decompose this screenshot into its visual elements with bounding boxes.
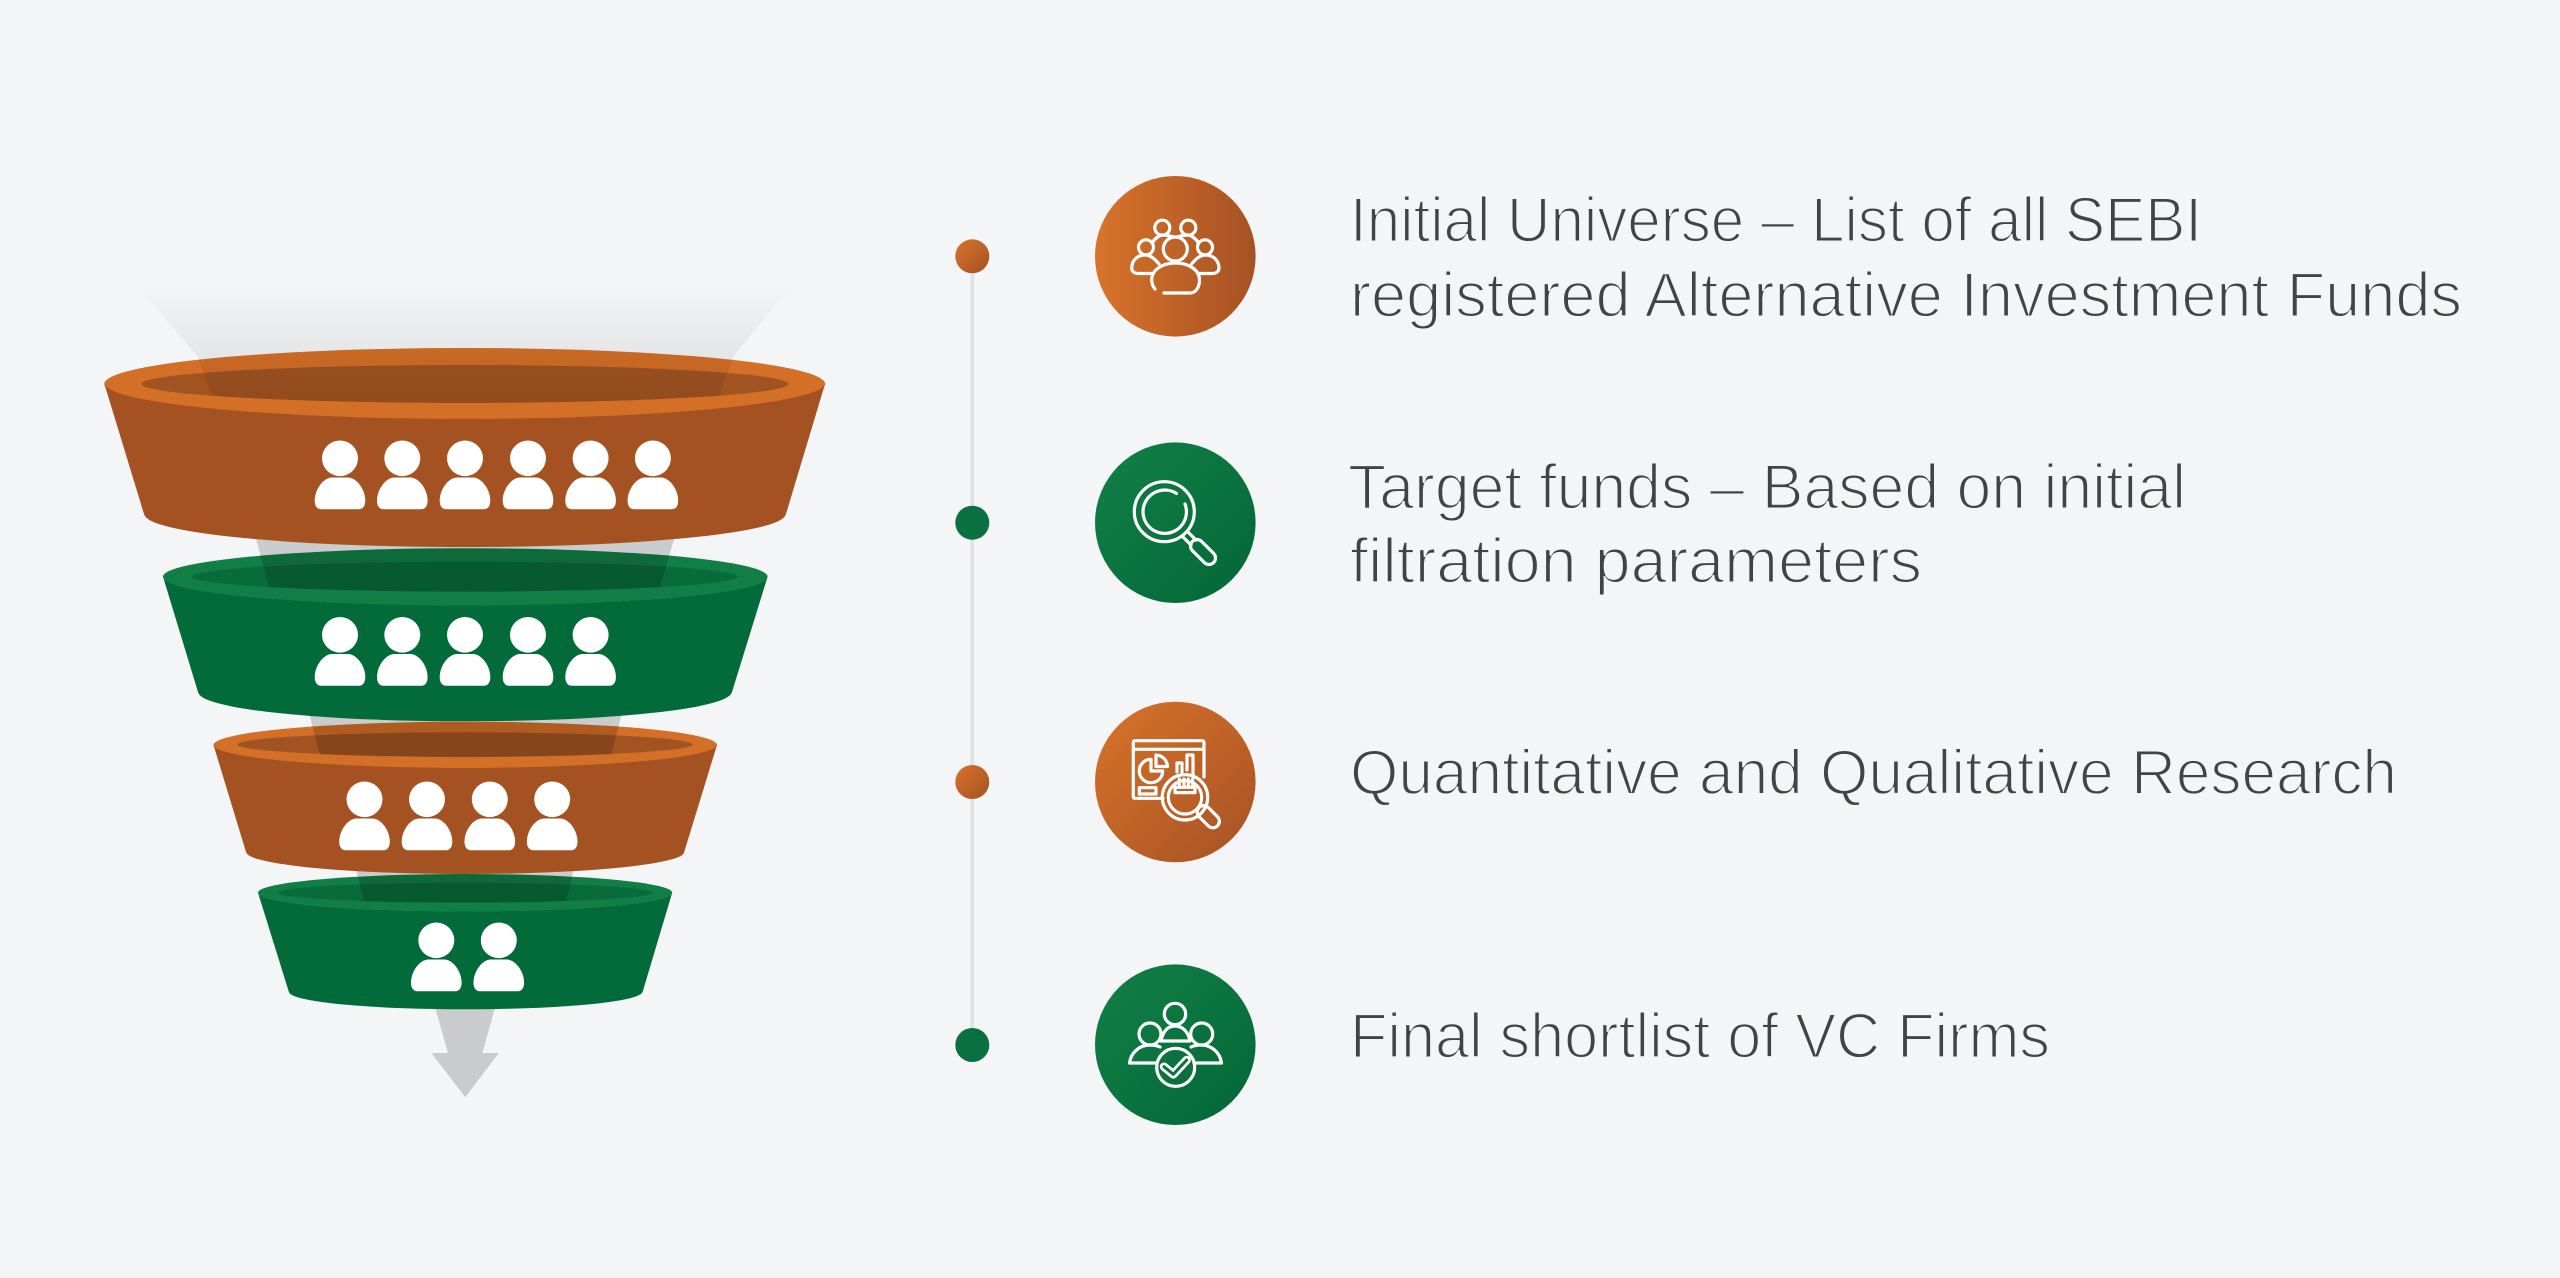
text: final shortlist: Final shortlist of VC Firms	[1350, 1002, 2050, 1072]
icon: magnifying glass	[1095, 442, 1256, 603]
people icons stage 4	[411, 922, 524, 991]
funnel stage 2 opening	[163, 548, 768, 605]
timeline dot 2	[955, 506, 989, 540]
funnel stage 2 body	[163, 577, 768, 721]
icon: group of people	[1095, 176, 1256, 337]
funnel stage 3 opening	[213, 722, 717, 768]
icon: dashboard with magnifier	[1095, 702, 1256, 862]
text: initial universe: Initial Universe – List of all SEBI	[1350, 186, 2202, 256]
text: target funds: Target funds – Based on initial	[1348, 452, 2186, 522]
timeline dot 1	[955, 239, 989, 273]
timeline line	[970, 256, 974, 1045]
timeline dot 3	[955, 765, 989, 799]
funnel stage 3 body	[214, 745, 717, 874]
text: target funds	[1348, 452, 2186, 597]
text: initial universe	[1350, 186, 2462, 331]
people icons stage 2	[315, 617, 616, 686]
people icons stage 3	[339, 782, 578, 850]
funnel stage 1 body	[104, 384, 825, 547]
translucent flow shadow and downward arrow	[138, 288, 789, 1097]
text: research: Quantitative and Qualitative Research	[1350, 738, 2397, 808]
funnel stage 4 body	[258, 893, 672, 1009]
icon: team with check mark	[1095, 964, 1256, 1125]
funnel stage 4 opening	[258, 874, 672, 911]
people icons stage 1	[315, 440, 678, 509]
text: initial universe: registered Alternative Investment Funds	[1350, 261, 2462, 331]
timeline dot 4	[955, 1028, 989, 1062]
funnel stage 1 opening	[104, 348, 825, 420]
text: target funds: filtration parameters	[1350, 527, 1922, 597]
